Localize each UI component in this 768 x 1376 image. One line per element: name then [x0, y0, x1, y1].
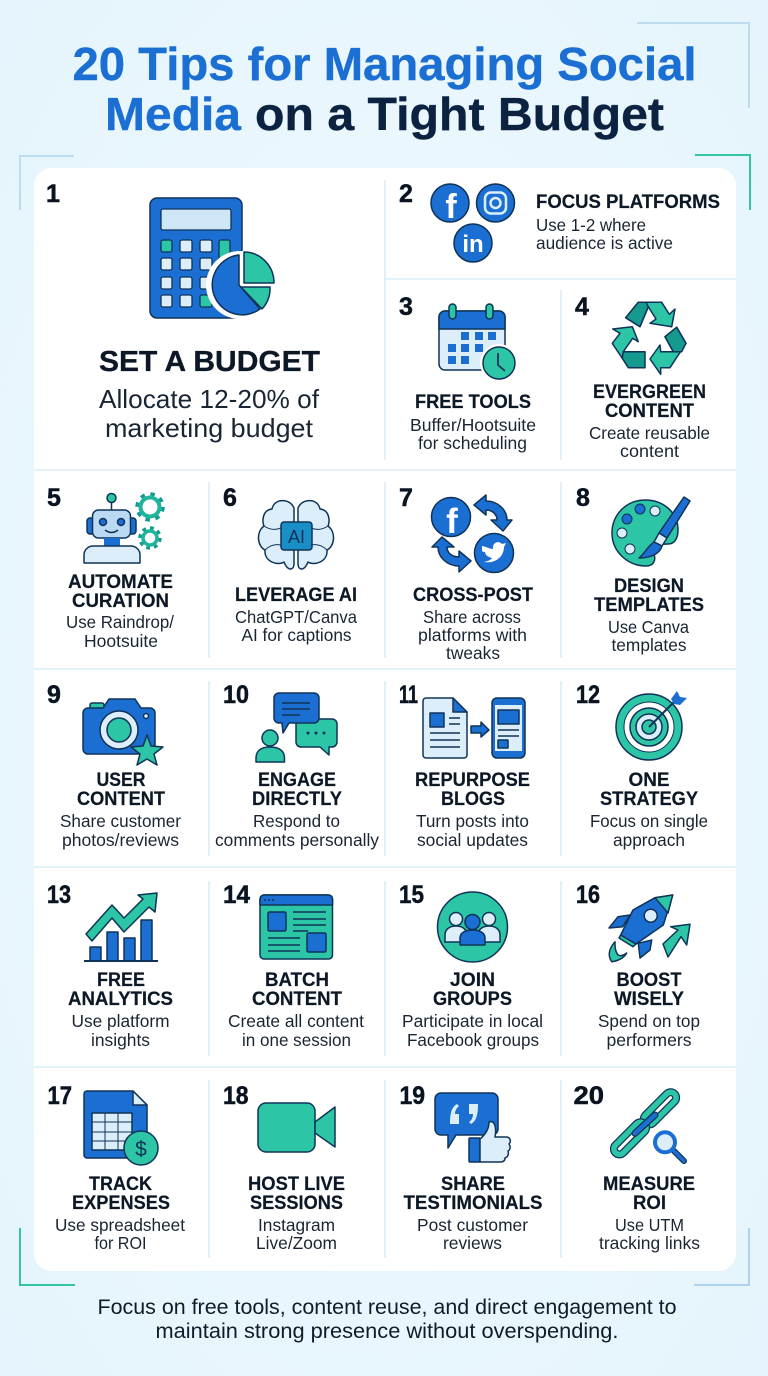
heading: DESIGN — [614, 576, 684, 597]
tip 5: automate curation: 5 — [47, 484, 61, 512]
description: Hootsuite — [84, 631, 158, 651]
tip 1: set a budget — [46, 180, 321, 443]
tip 15: join groups — [399, 881, 543, 1050]
description: Share customer — [60, 811, 181, 831]
description — [215, 811, 379, 850]
tip 14: batch content — [223, 881, 364, 1050]
description: for ROI — [94, 1233, 146, 1253]
tip 7: cross-post: 7 — [399, 484, 413, 512]
description — [590, 811, 708, 850]
heading — [433, 970, 512, 1010]
description — [608, 617, 689, 655]
description: Use Canva — [608, 617, 689, 637]
icon: robot with gears — [84, 494, 163, 563]
heading: TEMPLATES — [594, 595, 704, 616]
tip 9: user content — [47, 681, 181, 850]
description: Share across — [423, 607, 521, 627]
heading: LEVERAGE AI — [235, 585, 357, 606]
description: templates — [612, 635, 687, 655]
heading: BOOST — [616, 970, 682, 991]
description — [417, 1215, 528, 1253]
description — [598, 1011, 700, 1050]
heading — [72, 1174, 170, 1214]
heading: MEASURE — [603, 1174, 695, 1195]
icon: palette and brush — [612, 497, 690, 566]
icon: calculator and pie chart — [150, 198, 274, 319]
title: 20 Tips for Managing Social — [72, 38, 696, 90]
footer text: Focus on free tools, content reuse, and direct engagement to — [98, 1296, 676, 1319]
heading — [594, 576, 704, 616]
heading — [68, 970, 173, 1010]
icon: community group — [438, 892, 508, 962]
description: Use spreadsheet — [55, 1215, 185, 1235]
description — [66, 612, 174, 651]
heading — [404, 1174, 542, 1214]
icon: chat bubbles and person — [256, 693, 337, 762]
description — [55, 1215, 185, 1253]
description — [589, 423, 710, 461]
heading: REPURPOSE — [415, 770, 530, 791]
heading: EVERGREEN — [593, 382, 706, 403]
icon: testimonial bubble and thumbs up — [435, 1093, 510, 1162]
description: Use Raindrop/ — [66, 612, 174, 632]
icon: camera and star — [83, 699, 163, 765]
icon: social platforms — [431, 184, 514, 262]
description: Create all content — [228, 1011, 364, 1031]
description: in one session — [242, 1030, 351, 1050]
description: tracking links — [599, 1233, 700, 1253]
heading: FOCUS PLATFORMS — [536, 192, 720, 213]
tip 13: free analytics: 13 — [47, 881, 71, 909]
heading — [603, 1174, 695, 1214]
tip 6: leverage ai: 6 — [223, 484, 237, 512]
heading: STRATEGY — [600, 789, 698, 810]
description: Allocate 12-20% of — [99, 384, 320, 414]
heading: BATCH — [265, 970, 329, 991]
description: Spend on top — [598, 1011, 700, 1031]
description — [410, 415, 536, 453]
heading: USER — [96, 770, 146, 791]
tip 11: repurpose blogs: 11 — [399, 681, 418, 709]
heading — [252, 970, 342, 1010]
heading: CROSS-POST — [413, 585, 533, 606]
description — [256, 1215, 337, 1253]
icon: cross-post arrows: f — [446, 502, 458, 541]
heading: TRACK — [89, 1174, 152, 1195]
footer text: maintain strong presence without overspending. — [156, 1320, 618, 1343]
icon: growth bar chart — [84, 893, 158, 961]
heading: SHARE — [441, 1174, 505, 1195]
description: Facebook groups — [407, 1030, 539, 1050]
description: platforms with — [418, 625, 527, 645]
description — [536, 215, 673, 253]
tip 19: share testimonials: 19 — [400, 1082, 425, 1110]
tip 2: focus platforms: 2 — [399, 180, 413, 208]
heading: FREE — [97, 970, 145, 991]
icon: blog to phone — [423, 698, 525, 758]
tip 18: host live sessions: 18 — [223, 1082, 249, 1110]
tip 19: share testimonials — [400, 1082, 542, 1253]
tip 9: user content: 9 — [47, 681, 61, 709]
icon: target with dart — [616, 691, 687, 760]
heading — [68, 572, 173, 612]
description: tweaks — [446, 643, 500, 663]
tip 13: free analytics — [47, 881, 173, 1050]
heading: CONTENT — [605, 401, 694, 422]
description — [228, 1011, 364, 1050]
icon: social platforms: in — [462, 231, 484, 258]
tip 18: host live sessions — [223, 1082, 345, 1253]
icon: social platforms: f — [445, 188, 457, 226]
heading: CURATION — [72, 591, 169, 612]
icon: AI brain — [258, 501, 334, 569]
description: photos/reviews — [62, 830, 179, 850]
tip 5: automate curation — [47, 484, 174, 651]
tip 20: measure roi — [574, 1082, 700, 1253]
tip 11: repurpose blogs — [399, 681, 530, 850]
heading: EXPENSES — [72, 1193, 170, 1214]
title — [72, 38, 696, 140]
description: Post customer — [417, 1215, 528, 1235]
tip 10: engage directly: 10 — [223, 681, 249, 709]
description: approach — [613, 830, 685, 850]
icon: spreadsheet with coin: $ — [135, 1138, 147, 1161]
title: on a Tight Budget — [255, 88, 664, 140]
heading: AUTOMATE — [68, 572, 173, 593]
description: for scheduling — [418, 433, 527, 453]
heading — [248, 1174, 345, 1214]
description: insights — [91, 1030, 150, 1050]
description: Respond to — [253, 811, 340, 831]
heading: ANALYTICS — [68, 989, 173, 1010]
tip 15: join groups: 15 — [399, 881, 424, 909]
tip 3: free tools — [399, 293, 536, 453]
icon: calendar with clock — [439, 304, 518, 382]
description: social updates — [417, 830, 528, 850]
heading — [252, 770, 342, 810]
heading: SET A BUDGET — [99, 346, 321, 378]
heading: WISELY — [614, 989, 684, 1010]
tip 12: one strategy: 12 — [576, 681, 600, 709]
icon: rocket and arrow — [609, 895, 690, 962]
description: AI for captions — [242, 625, 352, 645]
heading: DIRECTLY — [252, 789, 342, 810]
heading: ONE — [628, 770, 670, 791]
tip 12: one strategy — [576, 681, 708, 850]
heading: ROI — [633, 1193, 666, 1214]
tip 16: boost wisely: 16 — [576, 881, 600, 909]
description: comments personally — [215, 830, 379, 850]
description: performers — [606, 1030, 692, 1050]
tip 20: measure roi: 20 — [574, 1082, 604, 1110]
heading — [415, 770, 530, 810]
description — [235, 607, 357, 645]
tip 1: set a budget: 1 — [46, 180, 60, 208]
heading: BLOGS — [441, 789, 505, 810]
description: audience is active — [536, 233, 673, 253]
title: Media — [105, 88, 241, 140]
tip 8: design templates: 8 — [576, 484, 590, 512]
description: Buffer/Hootsuite — [410, 415, 536, 435]
heading — [593, 382, 706, 422]
description — [402, 1011, 543, 1050]
tip 17: track expenses: 17 — [48, 1082, 72, 1110]
description — [599, 1215, 700, 1253]
tip 10: engage directly — [215, 681, 379, 850]
heading: HOST LIVE — [248, 1174, 345, 1195]
description — [418, 607, 527, 663]
heading: TESTIMONIALS — [404, 1193, 542, 1214]
description: Use UTM — [615, 1215, 684, 1235]
tip 4: evergreen content — [575, 293, 710, 461]
description: Focus on single — [590, 811, 708, 831]
description — [416, 811, 529, 850]
description: reviews — [443, 1233, 502, 1253]
heading: CONTENT — [252, 989, 342, 1010]
heading: SESSIONS — [250, 1193, 343, 1214]
heading — [614, 970, 684, 1010]
tip 14: batch content: 14 — [223, 881, 250, 909]
description: content — [620, 441, 679, 461]
heading: JOIN — [450, 970, 495, 991]
description: Turn posts into — [416, 811, 529, 831]
icon: recycle arrows — [612, 302, 686, 374]
icon: spreadsheet with coin — [84, 1091, 158, 1165]
heading: GROUPS — [433, 989, 512, 1010]
tip 8: design templates — [576, 484, 704, 655]
heading: FREE TOOLS — [415, 392, 531, 413]
icon: video camera — [258, 1103, 335, 1152]
description — [72, 1011, 170, 1050]
heading: CONTENT — [77, 789, 165, 810]
tip 7: cross-post — [399, 484, 533, 663]
icon: AI brain: AI — [288, 527, 305, 547]
description: Use platform — [72, 1011, 170, 1031]
description: Participate in local — [402, 1011, 543, 1031]
tip 4: evergreen content: 4 — [575, 293, 589, 321]
panel: tips grid — [34, 168, 736, 1271]
description: marketing budget — [105, 413, 314, 443]
icon: chain link and magnifier — [612, 1090, 684, 1161]
description — [99, 384, 320, 443]
description: Live/Zoom — [256, 1233, 337, 1253]
heading — [77, 770, 165, 810]
tip 6: leverage ai — [223, 484, 357, 645]
heading — [600, 770, 698, 810]
tip 2: focus platforms — [399, 180, 720, 262]
description: Instagram — [258, 1215, 335, 1235]
description — [60, 811, 181, 850]
description: Create reusable — [589, 423, 710, 443]
icon: cross-post arrows — [432, 495, 514, 572]
tip 3: free tools: 3 — [399, 293, 413, 321]
heading: ENGAGE — [258, 770, 336, 791]
description: ChatGPT/Canva — [235, 607, 357, 627]
tip 16: boost wisely — [576, 881, 700, 1050]
icon: content window — [260, 895, 332, 959]
description: Use 1-2 where — [536, 215, 646, 235]
tip 17: track expenses — [48, 1082, 185, 1253]
footer text — [98, 1296, 676, 1343]
